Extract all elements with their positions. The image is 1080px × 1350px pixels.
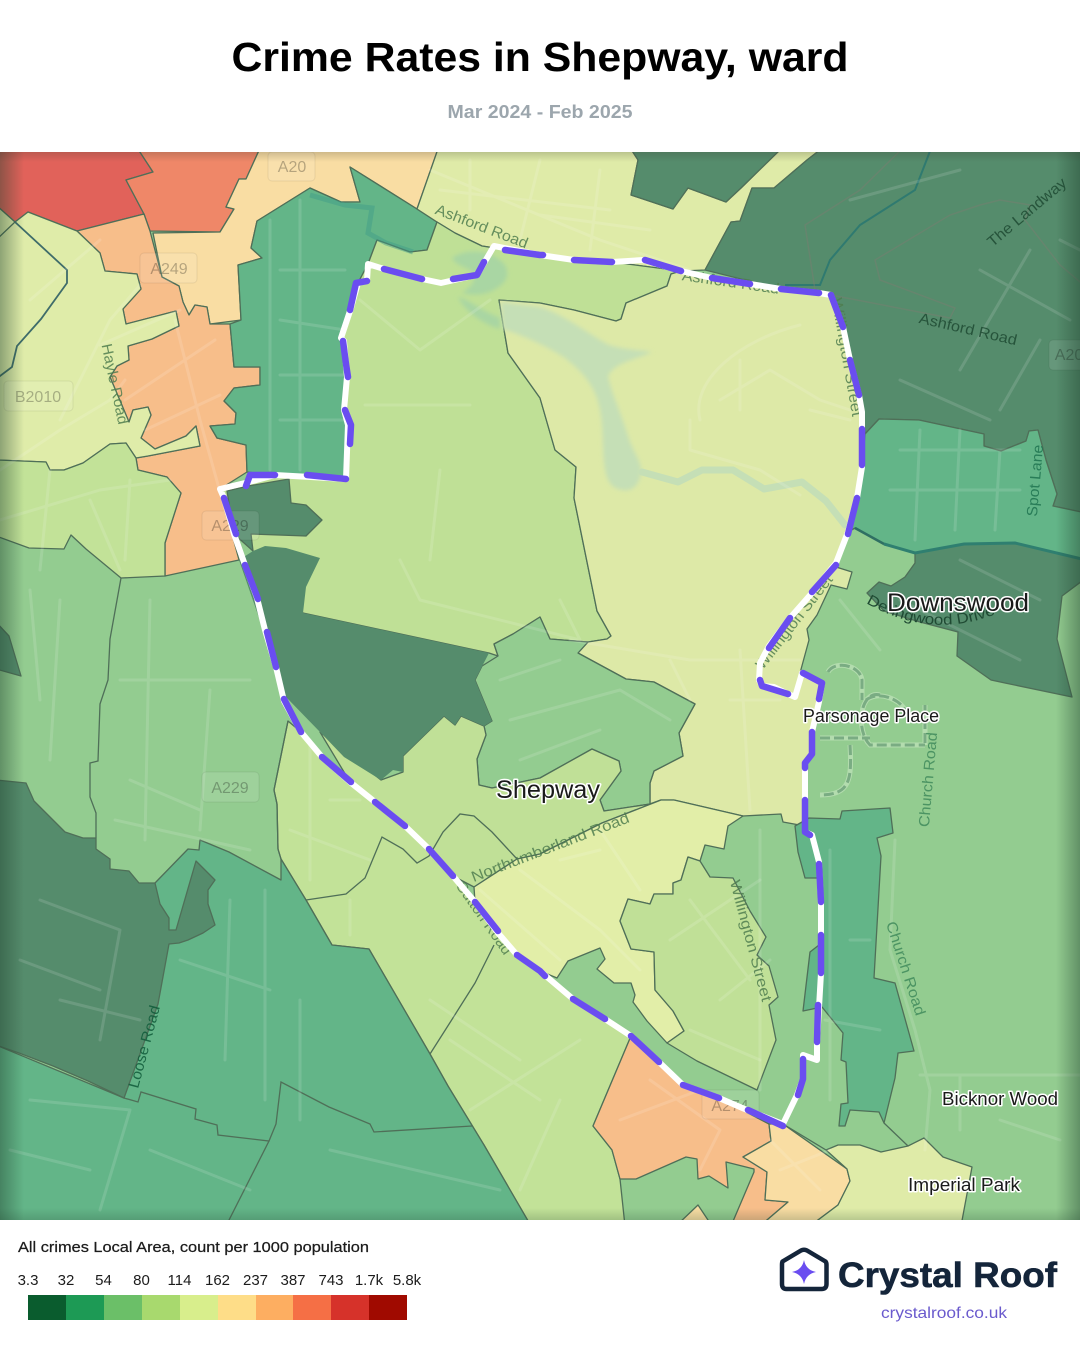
legend values: 54 <box>95 1272 112 1289</box>
ward: lime west <box>0 205 200 470</box>
ward: red town centre <box>0 146 153 231</box>
legend title: All crimes Local Area, count per 1000 population <box>18 1239 369 1256</box>
choropleth map <box>0 152 1080 1220</box>
road label: Willington Street north: Willington Street <box>828 297 865 419</box>
ward: green east <box>848 419 1080 560</box>
road label: The Landway: The Landway <box>984 174 1071 251</box>
road label: Sutton Road: Sutton Road <box>452 879 515 958</box>
legend values: 743 <box>318 1272 344 1289</box>
road label: Ashford Road on boundary: Ashford Road <box>681 267 780 298</box>
road label: Loose Road: Loose Road <box>125 1004 164 1090</box>
road label: Ashford Road north-west: Ashford Road <box>433 201 530 252</box>
road network <box>0 160 1080 1210</box>
A274 road badge: A274 <box>711 1098 749 1115</box>
ward: green north-west <box>210 167 437 479</box>
ward: light green central west <box>220 222 681 656</box>
ward: small pale orange patch <box>682 1204 709 1220</box>
legend values: 5.8k <box>393 1272 422 1289</box>
ward: dark south-west <box>0 780 215 1098</box>
river: east <box>884 543 1080 560</box>
A229 road badge south <box>202 772 259 802</box>
river: west <box>0 222 67 379</box>
road label: Ashford Road east: Ashford Road <box>917 310 1019 349</box>
ward: dark central <box>239 546 492 780</box>
A274 road badge <box>702 1090 759 1119</box>
icon: house with star <box>782 1250 826 1289</box>
A20 road badge: A20 <box>278 159 306 176</box>
subtitle: date range: Mar 2024 - Feb 2025 <box>448 102 632 122</box>
B2010 road badge: B2010 <box>15 389 61 406</box>
legend values: 237 <box>243 1272 268 1289</box>
legend <box>18 1239 422 1320</box>
legend values: 32 <box>58 1272 74 1289</box>
ward: light green south-west <box>274 721 631 1226</box>
B2010 road badge <box>4 381 73 411</box>
legend values <box>18 1272 422 1289</box>
ward: lime south <box>474 800 743 1043</box>
place label: Bicknor Wood: Bicknor Wood <box>942 1089 1058 1109</box>
ward: teal east <box>795 808 914 1126</box>
legend colour scale <box>28 1295 407 1320</box>
ward: pale orange north <box>153 146 439 324</box>
ward: lime Imperial Park <box>810 1138 972 1226</box>
road label: Church Road north: Church Road <box>916 732 941 828</box>
legend values: 387 <box>280 1272 306 1289</box>
water: central lake <box>501 302 652 490</box>
road label: Willington Street middle: Willington Street <box>752 571 837 673</box>
ward: dark north patch <box>630 152 779 210</box>
ward: orange west <box>77 214 260 576</box>
ward: orange south <box>593 1036 788 1226</box>
river: north-east <box>785 146 932 285</box>
stream in green ward <box>310 195 413 252</box>
A249 road badge: A249 <box>150 261 188 278</box>
place label: Parsonage Place: Parsonage Place <box>803 706 939 726</box>
ward: light green south of centre <box>320 716 661 887</box>
A229 road badge north <box>202 511 259 540</box>
legend values: 3.3 <box>18 1272 38 1289</box>
legend values: 1.7k <box>355 1272 384 1289</box>
legend values: 114 <box>168 1272 191 1289</box>
road label: Deringwood Drive: Deringwood Drive <box>867 594 994 625</box>
ward: green south-west <box>0 840 531 1226</box>
legend values: 162 <box>205 1272 230 1289</box>
road label: Northumberland Road: Northumberland Road <box>469 810 632 886</box>
place label: Imperial Park: Imperial Park <box>908 1175 1021 1195</box>
wordmark: Crystal Roof <box>838 1256 1057 1295</box>
A20 road badge <box>268 152 315 181</box>
A20 road badge east <box>1049 340 1080 370</box>
ward: small dark A229 <box>227 479 322 551</box>
ward: lime central <box>499 271 862 826</box>
ward: lime north <box>417 146 825 271</box>
A229 road badge north: A229 <box>211 518 249 535</box>
road label: Hayle Road: Hayle Road <box>98 342 131 426</box>
logo: Crystal Roof <box>782 1250 1057 1322</box>
ward boundary: purple dashes <box>224 250 862 1126</box>
road label: Spot Lane: Spot Lane <box>1024 444 1047 517</box>
ward: dark north-east <box>705 146 1080 513</box>
water: central stream <box>642 470 845 525</box>
ward: pale orange south <box>743 1124 850 1226</box>
legend values: 80 <box>133 1272 150 1289</box>
A249 road badge <box>140 253 197 283</box>
ward boundary: white base line <box>220 246 862 1124</box>
A229 road badge south: A229 <box>211 780 249 797</box>
parish boundary north-east <box>805 146 1080 318</box>
ward: mid green Shepway centre <box>475 617 695 811</box>
ward: dark Downswood <box>867 543 1080 697</box>
ward boundary lines <box>0 222 908 1226</box>
map edge vignette <box>0 152 1080 1220</box>
place label: Shepway: Shepway <box>496 776 600 804</box>
water: north pool <box>452 252 507 329</box>
ward: small dark far west <box>0 622 21 676</box>
title: Crime Rates in Shepway, ward <box>232 34 848 80</box>
place label: Downswood: Downswood <box>887 589 1029 617</box>
ward: light green Willington <box>620 857 778 1090</box>
road label: Church Road south: Church Road <box>882 919 929 1018</box>
ward: orange-red <box>126 146 261 232</box>
website url: crystalroof.co.uk <box>881 1305 1008 1322</box>
ward: light green west <box>0 443 181 578</box>
estate paths near Parsonage Place <box>820 665 925 795</box>
road label: Willington Street south: Willington Street <box>726 878 775 1004</box>
